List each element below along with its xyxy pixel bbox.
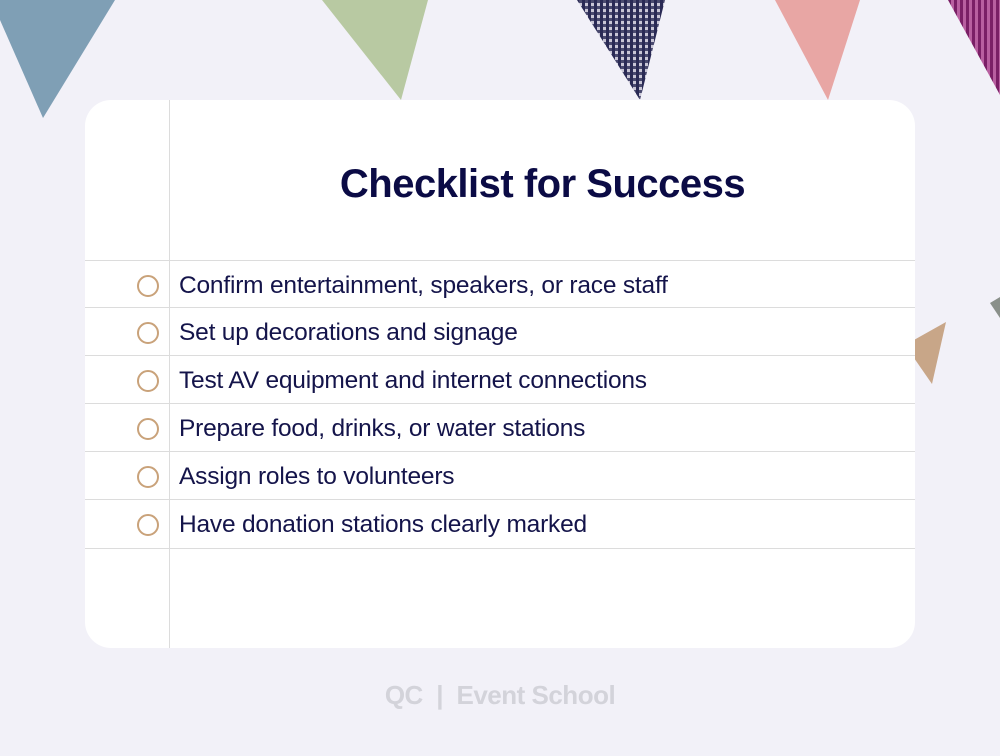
item 5: Assign roles to volunteers	[179, 463, 454, 490]
flag: pink dotted	[775, 0, 860, 100]
flag: navy gingham	[577, 0, 665, 100]
flag: purple gingham	[948, 0, 1000, 95]
bunting flags	[0, 0, 1000, 384]
item 1: Confirm entertainment, speakers, or race staff	[179, 272, 668, 299]
flag: tan	[905, 322, 946, 384]
footer logo: QC | Event School	[385, 680, 615, 710]
item 2: Set up decorations and signage	[179, 319, 518, 346]
flag: blue floral	[0, 0, 115, 118]
item 5	[85, 451, 915, 500]
item 6	[85, 499, 915, 549]
item 1	[85, 260, 915, 309]
checklist card	[85, 100, 915, 648]
item 4	[85, 403, 915, 452]
flag: gray	[990, 297, 1000, 318]
item 6: Have donation stations clearly marked	[179, 511, 587, 538]
title: Checklist for Success	[340, 162, 745, 206]
item 4: Prepare food, drinks, or water stations	[179, 415, 585, 442]
item 2	[85, 307, 915, 356]
item 3	[85, 355, 915, 404]
item 3: Test AV equipment and internet connections	[179, 367, 647, 394]
flag: green floral	[322, 0, 428, 100]
